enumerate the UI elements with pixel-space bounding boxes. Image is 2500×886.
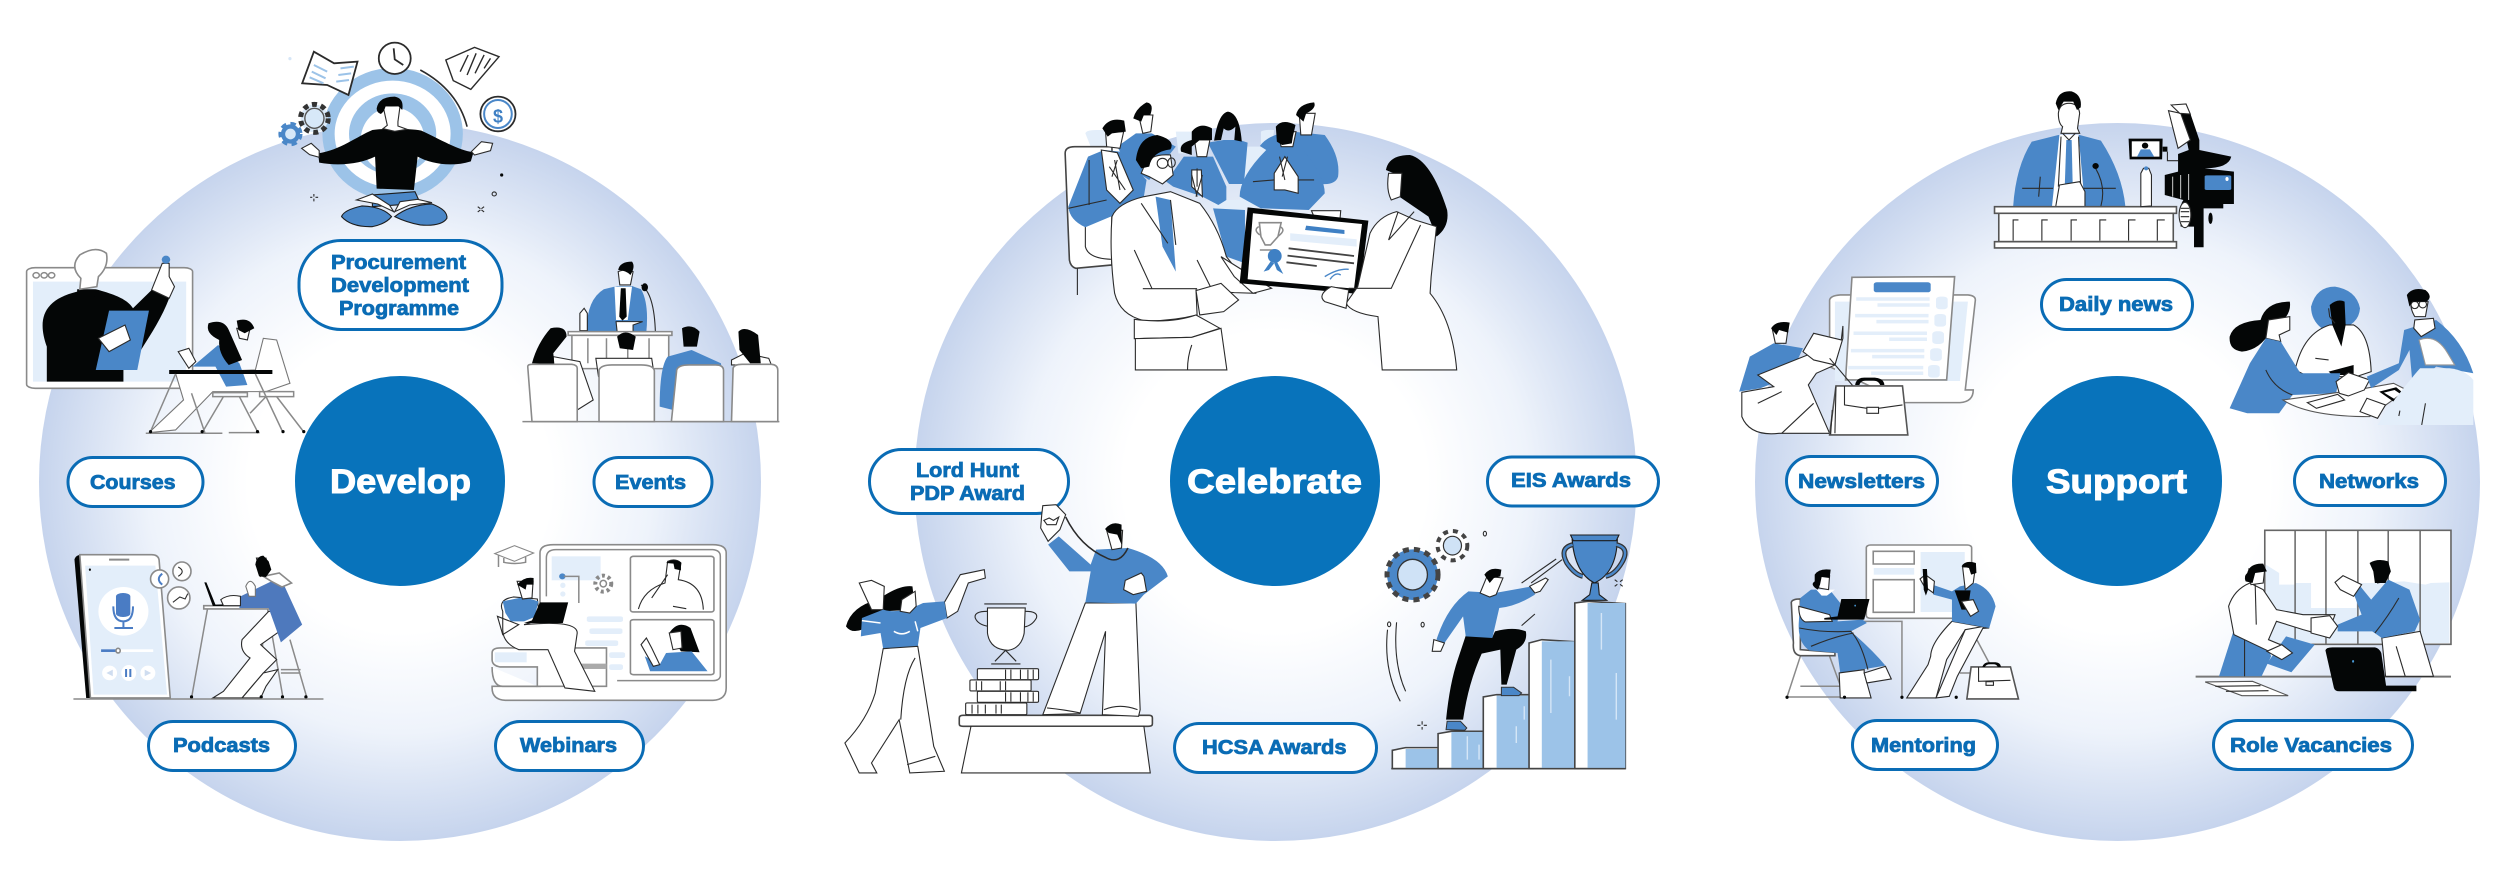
pill: Webinars [496,722,644,770]
centre circle: Develop [295,376,505,586]
pill: Events [594,458,712,506]
illustration: networking handshake at table [2230,287,2473,425]
pill: Procurement Development Programme: Programme [339,298,459,320]
illustration: meditating man with icons: $ [493,107,503,127]
illustration: award certificate presentation with applauding audience [1065,102,1457,370]
pill: Networks: Networks [2319,471,2419,493]
pill: Procurement Development Programme: Procurement [331,252,466,274]
pill: Daily news [2042,280,2192,330]
pill: HCSA Awards: HCSA Awards [1202,737,1346,759]
pill: Role Vacancies: Role Vacancies [2230,735,2392,757]
pill: Mentoring [1852,720,1998,770]
pill: Events: Events [615,472,686,494]
illustration: podcast phone and presenter [73,555,323,699]
background disc: Develop [39,123,761,841]
panel: Develop [27,43,779,841]
pill: Lord Hunt PDP Award: PDP Award [910,483,1025,505]
pill: Daily news: Daily news [2059,294,2173,316]
pill: Podcasts: Podcasts [173,735,270,757]
pill: Procurement Development Programme: Development [331,275,469,297]
illustration: person reading newsletter with laptop and briefcase [1739,277,1975,435]
panel: Support [1739,91,2480,841]
illustration: online course teacher and students [27,250,305,433]
illustration: man climbing bar-chart steps to trophy [1387,531,1625,769]
pill: Mentoring: Mentoring [1871,735,1976,757]
background disc: Celebrate [914,123,1636,841]
centre circle: Support: Support [2046,463,2187,501]
centre circle: Celebrate: Celebrate [1187,463,1362,501]
pill: Lord Hunt PDP Award: Lord Hunt [916,460,1019,482]
illustration: speaker at event with audience [522,262,779,422]
illustration: mentoring session at desk [1785,545,2018,699]
pill: Networks [2294,456,2446,506]
centre circle: Celebrate [1170,376,1380,586]
pill: EIS Awards: EIS Awards [1511,470,1631,492]
pill: Procurement Development Programme [299,240,502,330]
illustration: press speaker at podium with camera [1995,91,2234,248]
pill: EIS Awards [1488,457,1658,506]
panel: Celebrate [845,102,1658,841]
background disc: Support [1755,123,2480,841]
illustration: man and woman with trophy on pedestal [845,505,1168,773]
pill: Courses [68,458,203,506]
illustration: meditating man with icons [281,43,516,227]
pill: Newsletters: Newsletters [1798,471,1925,493]
centre circle: Develop: Develop [330,463,471,501]
centre circle: Support [2012,376,2222,586]
illustration: role vacancy handshake by office window [2196,530,2451,696]
pill: Webinars: Webinars [520,735,617,757]
pill: Courses: Courses [90,472,176,494]
pill: Podcasts [148,722,296,770]
illustration: webinar with laptop and video frames [492,545,726,700]
pill: Role Vacancies [2214,720,2412,770]
pill: HCSA Awards [1174,724,1376,772]
pill: Newsletters [1786,456,1938,506]
pill: Lord Hunt PDP Award [870,450,1068,514]
